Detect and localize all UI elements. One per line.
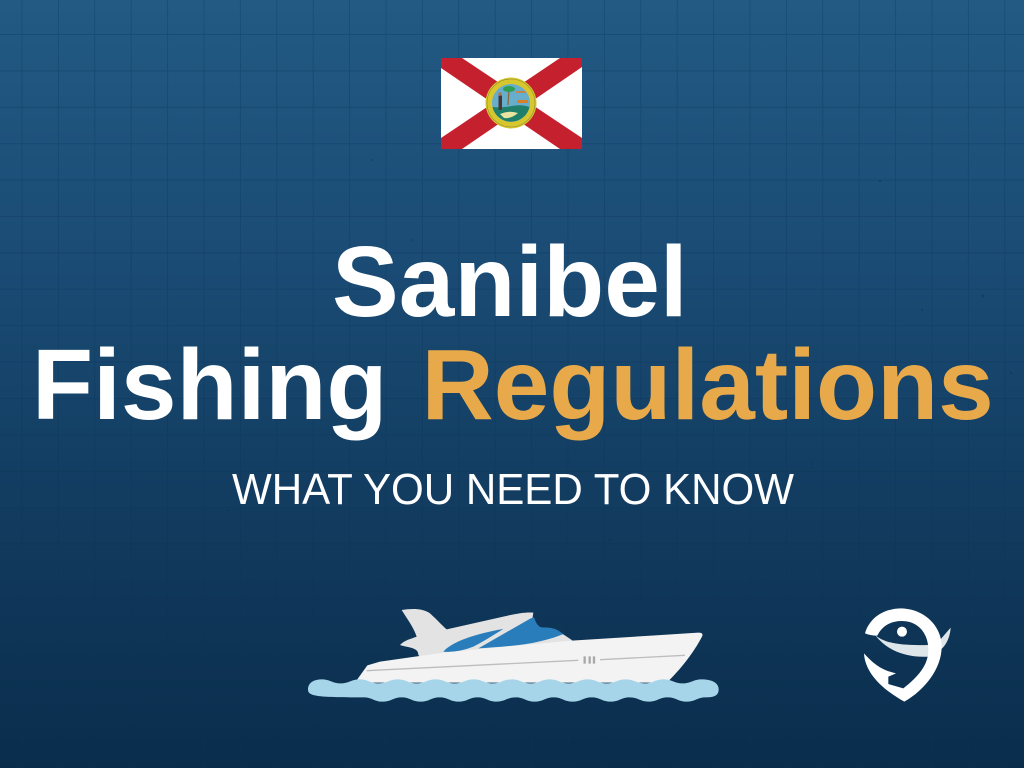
logo eye — [897, 627, 907, 637]
title line: Sanibel: Sanibel — [332, 226, 688, 338]
boat cabin and fin — [400, 609, 573, 657]
logo hook body — [864, 608, 942, 702]
boat windows — [443, 617, 563, 652]
water waves — [308, 679, 719, 702]
logo band and tail — [875, 628, 951, 657]
title — [32, 226, 994, 441]
icon: Florida flag — [441, 58, 582, 149]
hull stripe and vents — [367, 655, 685, 671]
title line: Fishing Regulations: Fishing — [32, 329, 388, 441]
title line: Fishing Regulations: Regulations — [422, 329, 994, 441]
icon: white yacht on water — [308, 609, 719, 702]
boat hull — [355, 633, 703, 683]
icon: fish logo — [864, 608, 951, 702]
subtitle: WHAT YOU NEED TO KNOW — [232, 465, 794, 514]
